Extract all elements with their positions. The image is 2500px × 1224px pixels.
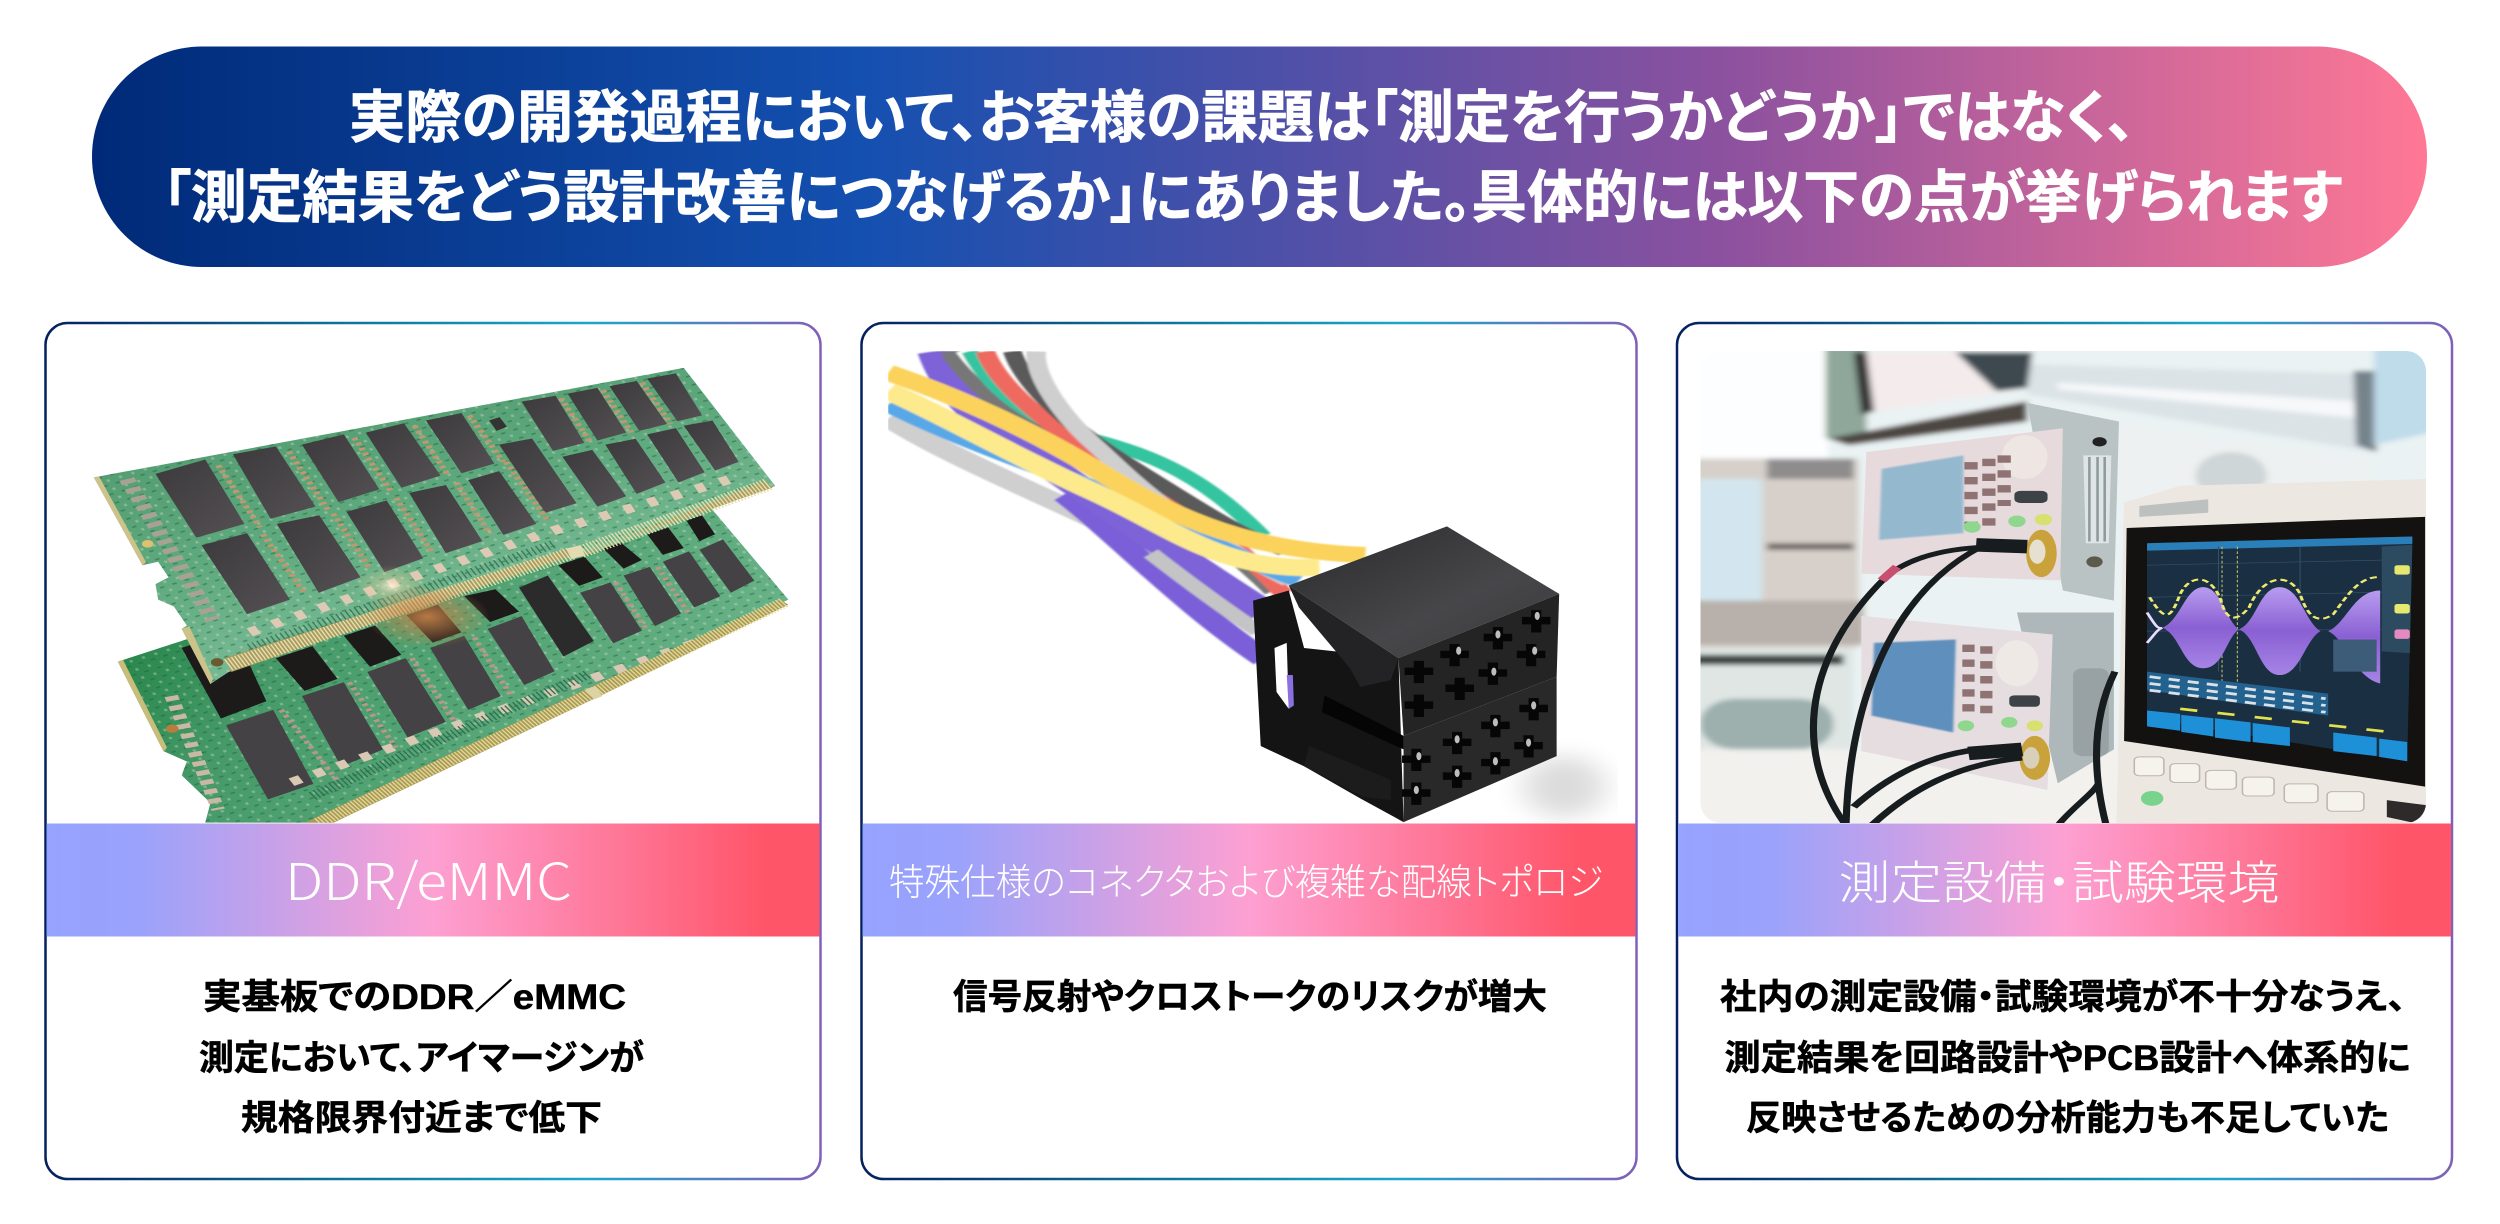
band title: 特殊仕様のコネクタおよび複雑な配線トポロジ [889, 852, 1603, 906]
cables [1813, 545, 2115, 825]
body text: 規格限界付近まで低下 [241, 1099, 602, 1138]
band title: DDR/eMMC [285, 841, 572, 915]
blurred background equipment [1690, 344, 2446, 831]
body text [199, 978, 644, 1138]
panel: measurement equipment [1677, 323, 2452, 1179]
waveform lobes [2147, 577, 2380, 683]
headline line 2: 「測定結果をどう設計改善につなげるか」にありました。具体的には以下の点が挙げられます [163, 166, 2342, 230]
panel: connector [862, 323, 1636, 1179]
title band [862, 824, 1636, 936]
headline line 1: 実際の開発過程において、お客様の課題は「測定を行うかどうか」ではなく、 [349, 86, 2135, 150]
upper signal generator [1861, 403, 2119, 601]
body text: 信号反射やクロストークのリスクが増大 [953, 978, 1547, 1017]
body text: 社内の測定設備・試験環境が不十分なうえ、 [1720, 978, 2406, 1017]
body text: 反映させるための分析能力も不足していた [1746, 1099, 2389, 1138]
front panel buttons [2134, 757, 2364, 811]
title band [1678, 824, 2451, 936]
panel: DDR/eMMC [46, 323, 820, 1179]
upper memory module [94, 368, 775, 684]
band title: 測定設備・試験環境 [1838, 847, 2280, 913]
wire bundle [888, 351, 1365, 658]
oscilloscope [2116, 479, 2430, 825]
power button [2141, 791, 2163, 806]
title band [46, 824, 820, 936]
lower memory module [118, 507, 788, 823]
body text: 測定において、アイマージンが [199, 1039, 644, 1078]
body text: 測定結果を回路設計やPCB設計へ体系的に [1724, 1039, 2410, 1078]
measurement table [2147, 672, 2407, 761]
body text: 実基板でのDDR／eMMC [203, 978, 626, 1017]
body text [1720, 978, 2410, 1138]
image: connector and wires [888, 351, 1605, 822]
header banner [92, 46, 2427, 267]
floor shadow [1523, 756, 1605, 817]
lower signal generator [1861, 613, 2114, 790]
image: memory modules [94, 368, 788, 823]
connector housing [1253, 526, 1559, 822]
lens flare [371, 588, 487, 646]
image: oscilloscope and signal generators [1690, 344, 2446, 831]
